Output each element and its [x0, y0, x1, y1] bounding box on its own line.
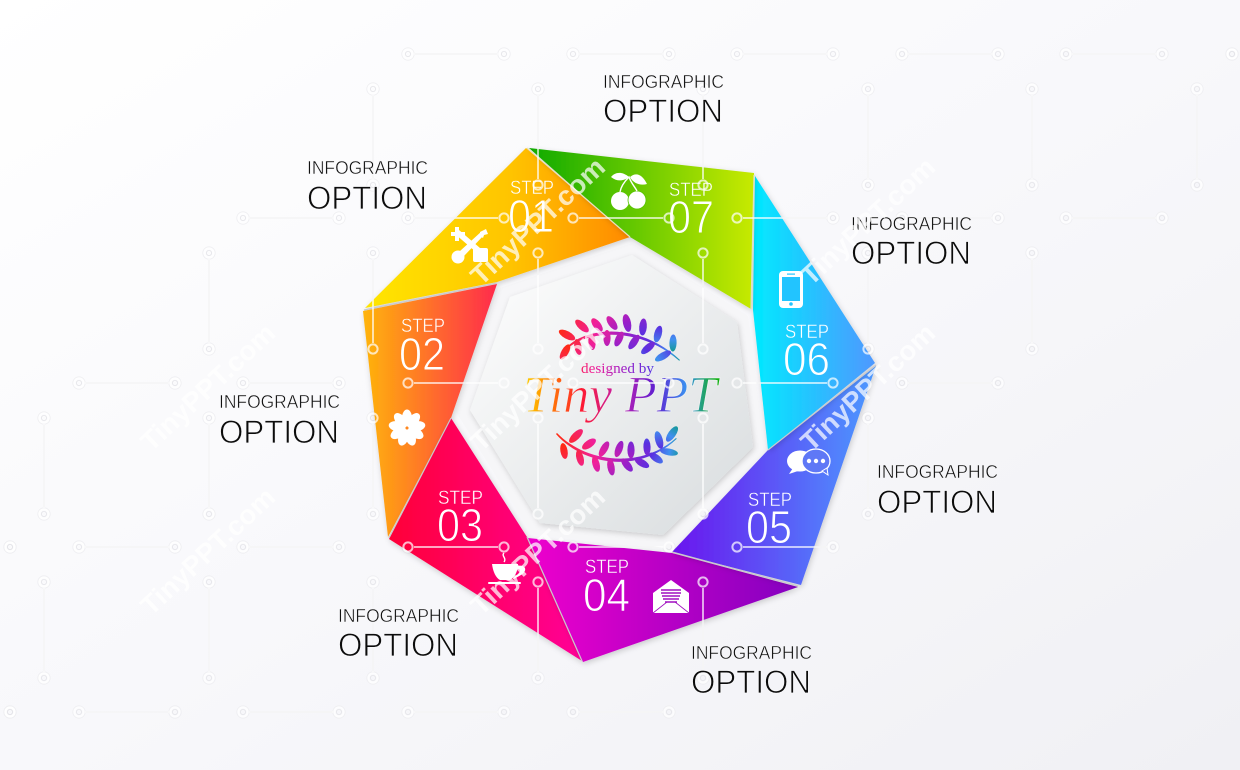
watermarks: TinyPPT.com — [795, 318, 941, 457]
step number: 06 — [783, 333, 830, 385]
watermarks: TinyPPT.com — [795, 152, 941, 291]
step number: 07 — [668, 191, 714, 243]
panel: step 04 — [528, 538, 798, 662]
step number: 05 — [746, 501, 792, 553]
option label: step 06 — [851, 213, 972, 271]
step number: 01 — [508, 190, 554, 242]
option label: step 03 — [338, 605, 459, 663]
option label: step 04: INFOGRAPHIC — [691, 642, 812, 663]
option label: step 02 — [219, 391, 340, 450]
option label: step 07: OPTION — [603, 93, 723, 129]
option label: step 01: OPTION — [307, 180, 427, 216]
step number: 02 — [399, 328, 445, 380]
watermarks: TinyPPT.com — [465, 152, 611, 291]
watermarks: TinyPPT.com — [135, 318, 281, 457]
option label: step 04: OPTION — [691, 664, 811, 700]
icon: chat bubbles — [787, 449, 830, 475]
step label: STEP — [438, 487, 483, 509]
option label: step 01: INFOGRAPHIC — [307, 157, 428, 178]
option label: step 05: OPTION — [877, 484, 997, 520]
panel: centre heptagon halo — [456, 243, 765, 548]
option label: step 06: OPTION — [851, 235, 971, 271]
option label: step 05 — [877, 461, 998, 520]
step number: 03 — [437, 499, 483, 551]
step label: STEP — [748, 489, 792, 511]
icon: cherries — [611, 173, 647, 210]
panel: step 05 — [672, 366, 876, 585]
icon: envelope — [653, 580, 689, 613]
panel: step 02 — [363, 284, 497, 537]
panel: step 07 — [529, 148, 754, 309]
panel: step 01 — [365, 148, 630, 308]
logo: designed by Tiny PPT — [523, 313, 720, 476]
step label: STEP — [669, 179, 713, 201]
option label: step 07: INFOGRAPHIC — [603, 71, 724, 92]
panel: step 03 — [389, 418, 582, 661]
option label: step 02: INFOGRAPHIC — [219, 391, 340, 412]
Tiny PPT: Tiny PPT — [523, 367, 720, 424]
icon: smartphone — [779, 271, 803, 308]
step label: STEP — [785, 321, 829, 343]
panel: centre heptagon — [470, 255, 753, 535]
designed by: designed by — [581, 361, 655, 377]
step label: STEP — [585, 556, 629, 578]
icon: coffee cup — [488, 553, 525, 584]
watermarks — [135, 152, 941, 621]
panel: step 06 — [753, 176, 875, 450]
bottom wreath — [556, 424, 680, 476]
segment seam lines — [364, 148, 876, 661]
step number: 04 — [583, 569, 630, 621]
step label: STEP — [401, 315, 445, 337]
option label: step 01 — [307, 157, 428, 216]
step label: STEP — [510, 177, 554, 199]
option label: step 03: INFOGRAPHIC — [338, 605, 459, 626]
watermarks: TinyPPT.com — [465, 482, 611, 621]
icon: flower — [388, 410, 426, 447]
option label: step 07 — [603, 71, 724, 129]
option label: step 06: INFOGRAPHIC — [851, 213, 972, 234]
option label: step 02: OPTION — [219, 414, 339, 450]
watermarks: TinyPPT.com — [135, 482, 281, 621]
icon: keys and lock — [451, 227, 488, 264]
watermarks: TinyPPT.com — [465, 318, 611, 457]
option label: step 04 — [691, 642, 812, 700]
top wreath — [557, 313, 680, 364]
option label: step 03: OPTION — [338, 627, 458, 663]
option label: step 05: INFOGRAPHIC — [877, 461, 998, 482]
